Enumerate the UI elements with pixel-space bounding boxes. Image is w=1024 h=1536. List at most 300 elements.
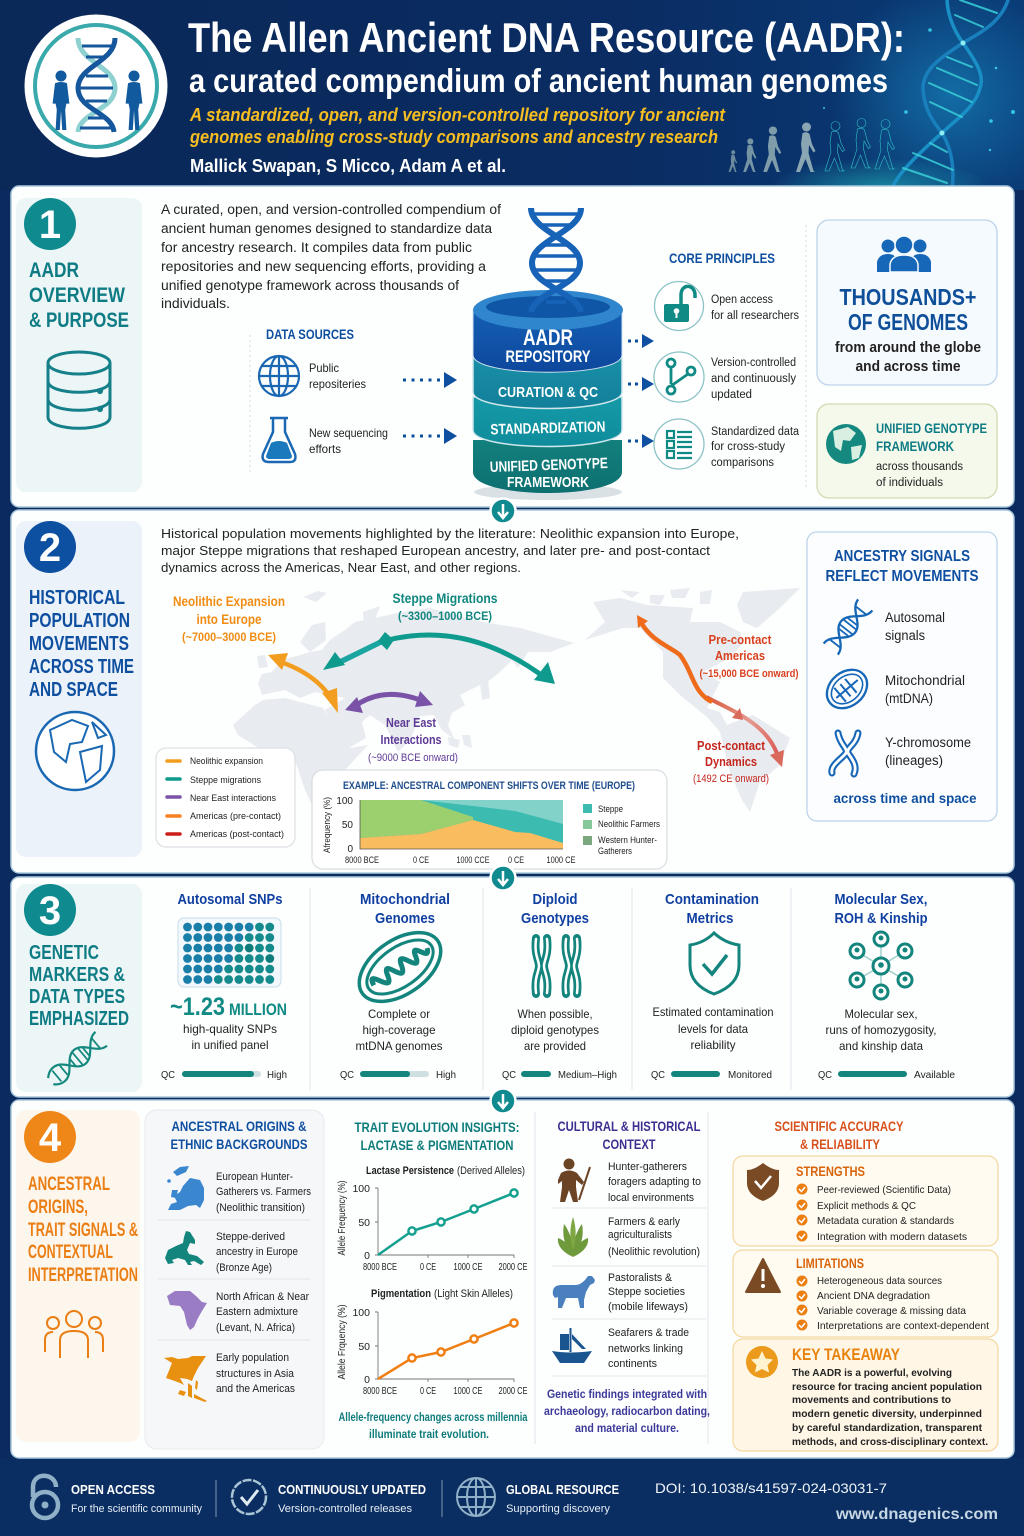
panel 2: historical population movements bbox=[11, 510, 1014, 873]
intro text: A curated, open, and version-controlled compendium of bbox=[161, 202, 501, 217]
map legend: Americas (post-contact) bbox=[190, 829, 284, 840]
line chart: lactase persistence: 100 bbox=[352, 1183, 370, 1195]
text: seafarers: Seafarers & trade bbox=[608, 1327, 689, 1339]
section heading: AND SPACE bbox=[29, 679, 118, 701]
core principles: CORE PRINCIPLES bbox=[669, 250, 775, 266]
cylinder layer: unified genotype framework: UNIFIED GENOTYPE bbox=[490, 455, 608, 476]
QC bar bbox=[818, 1069, 955, 1081]
principle: version control: updated bbox=[711, 389, 752, 401]
intro text bbox=[161, 526, 739, 575]
QC bar: QC bbox=[651, 1069, 665, 1081]
column: contamination metrics: Estimated contamination bbox=[652, 1005, 774, 1019]
arrow: pre-contact Americas bbox=[637, 615, 712, 702]
icon: people bbox=[877, 236, 931, 272]
column: scientific accuracy bbox=[733, 1118, 998, 1451]
stacked area chart: 0 CE bbox=[413, 855, 429, 866]
arrow: near east interactions bbox=[345, 691, 433, 713]
QC bar: High bbox=[436, 1069, 456, 1081]
text: farmers: (Neolithic revolution) bbox=[608, 1246, 700, 1258]
card: unified genotype framework: FRAMEWORK bbox=[876, 438, 954, 454]
QC bar bbox=[340, 1069, 456, 1081]
text: hunter-gatherers bbox=[608, 1161, 701, 1204]
checklist: Metadata curation & standards bbox=[817, 1215, 954, 1227]
QC bar: High bbox=[267, 1069, 287, 1081]
principle: standardized data bbox=[654, 419, 800, 469]
footer: DOI: DOI: 10.1038/s41597-024-03031-7 bbox=[655, 1480, 887, 1496]
arrow: steppe migrations bbox=[323, 632, 555, 684]
context note: and material culture. bbox=[575, 1421, 679, 1435]
section heading: MOVEMENTS bbox=[29, 633, 129, 655]
column: mitochondrial genomes: Complete or bbox=[368, 1007, 430, 1021]
line chart: pigmentation: 2000 CE bbox=[498, 1386, 528, 1397]
column: trait evolution bbox=[336, 1112, 535, 1444]
footer: open access: For the scientific community bbox=[71, 1503, 202, 1515]
column: mitochondrial genomes bbox=[340, 891, 456, 1081]
line chart: pigmentation: Pigmentation(Light Skin Alleles) bbox=[371, 1288, 513, 1300]
icon: shield bbox=[690, 933, 739, 994]
QC bar: QC bbox=[818, 1069, 832, 1081]
map label: Pre-contact: Pre-contact bbox=[708, 632, 772, 647]
card: ancestry signals: ANCESTRY SIGNALS bbox=[834, 548, 970, 565]
card: thousands of genomes: and across time bbox=[856, 358, 960, 375]
icon: chromosomes bbox=[536, 938, 577, 994]
checklist bbox=[796, 1275, 989, 1332]
icon: shield bbox=[747, 1163, 779, 1201]
line chart: pigmentation: Allele Frquency (%) bbox=[336, 1304, 348, 1380]
origin text: early populations: structures in Asia bbox=[216, 1368, 295, 1380]
cylinder layer: AADR repository bbox=[473, 290, 623, 372]
section heading bbox=[29, 587, 134, 701]
text: hunter-gatherers: foragers adapting to bbox=[608, 1176, 701, 1188]
line chart: pigmentation: 0 bbox=[364, 1374, 370, 1386]
QC bar bbox=[161, 1069, 287, 1081]
map label: Post-contact: (1492 CE onward) bbox=[693, 773, 769, 785]
repository cylinder bbox=[473, 208, 623, 500]
text: autosomal signals: Autosomal bbox=[885, 610, 945, 625]
card: key takeaway: KEY TAKEAWAY bbox=[792, 1345, 901, 1364]
icon: SNP dot matrix bbox=[178, 918, 281, 987]
column: mitochondrial genomes: mtDNA genomes bbox=[356, 1039, 442, 1053]
text: farmers: Farmers & early bbox=[608, 1216, 680, 1228]
card: thousands of genomes: THOUSANDS+ bbox=[840, 284, 976, 310]
section heading: ACROSS TIME bbox=[29, 656, 134, 678]
text: y-chromosome: Y-chromosome bbox=[885, 735, 971, 750]
context note bbox=[544, 1387, 710, 1435]
principle: version control bbox=[654, 352, 796, 402]
card: key takeaway: movements and contributions to bbox=[792, 1394, 951, 1406]
QC bar: Available bbox=[914, 1069, 955, 1081]
QC bar: QC bbox=[340, 1069, 354, 1081]
card: limitations bbox=[733, 1250, 998, 1337]
text: pastoralists: Steppe societies bbox=[608, 1286, 685, 1298]
map label: Post-contact: Dynamics bbox=[705, 754, 757, 769]
icon: DNA helix bbox=[531, 208, 581, 312]
section heading: ORIGINS, bbox=[28, 1197, 88, 1218]
world map bbox=[233, 588, 800, 818]
QC bar: QC bbox=[161, 1069, 175, 1081]
title: The Allen Ancient DNA Resource (AADR): bbox=[188, 14, 905, 61]
section heading: POPULATION bbox=[29, 610, 130, 632]
card: key takeaway: resource for tracing ancient population bbox=[792, 1381, 982, 1393]
icon: horse bbox=[165, 1231, 204, 1265]
icon: Asia and Americas map bbox=[164, 1356, 207, 1402]
origin text: early populations: and the Americas bbox=[216, 1383, 295, 1395]
column: diploid genotypes: are provided bbox=[524, 1039, 586, 1053]
icon: Y chromosome bbox=[832, 733, 858, 774]
card: strengths: STRENGTHS bbox=[796, 1163, 865, 1179]
chart card: ancestral component shifts: EXAMPLE: ANCESTRAL COMPONENT SHIFTS OVER TIME (EUROPE) bbox=[343, 780, 635, 792]
icon: background DNA helix bbox=[892, 0, 1008, 190]
icon: people group bbox=[45, 1311, 103, 1358]
QC bar: Monitored bbox=[728, 1069, 772, 1081]
origin text: steppe: ancestry in Europe bbox=[216, 1246, 298, 1258]
text: pastoralists: (mobile lifeways) bbox=[608, 1301, 688, 1313]
section heading: CONTEXTUAL bbox=[28, 1242, 113, 1263]
connector arrow 3 bbox=[490, 1088, 516, 1114]
arrow: post-contact dynamics bbox=[706, 697, 784, 767]
stat: 1.23 million bbox=[170, 993, 287, 1021]
text: public repositories: Public bbox=[309, 361, 339, 375]
stacked area chart: 50 bbox=[342, 820, 353, 831]
checklist: Heterogeneous data sources bbox=[817, 1275, 942, 1287]
column: diploid genotypes: diploid genotypes bbox=[511, 1023, 599, 1037]
text: farmers bbox=[608, 1216, 700, 1258]
footer: global resource: GLOBAL RESOURCE bbox=[506, 1482, 619, 1497]
section heading: DATA TYPES bbox=[29, 986, 125, 1008]
text: autosomal signals bbox=[885, 610, 945, 643]
section heading bbox=[29, 942, 129, 1030]
authors: Mallick Swapan, S Micco, Adam A et al. bbox=[190, 156, 506, 176]
section sidebar bbox=[16, 1110, 140, 1442]
chart note: illuminate trait evolution. bbox=[369, 1427, 489, 1441]
subtitle: genomes enabling cross-study comparisons and ancestry research bbox=[189, 127, 718, 147]
sub-panel: ancestral origins: ETHNIC BACKGROUNDS bbox=[170, 1136, 308, 1152]
footer: open access: OPEN ACCESS bbox=[71, 1482, 155, 1497]
card: unified genotype framework bbox=[817, 404, 997, 498]
cylinder layer: standardization: STANDARDIZATION bbox=[490, 418, 606, 439]
map label: Steppe migrations: (~3300–1000 BCE) bbox=[398, 609, 492, 623]
footer: global resource bbox=[457, 1478, 619, 1516]
principle: open access: for all researchers bbox=[711, 310, 799, 322]
section number bbox=[24, 521, 76, 573]
intro text: ancient human genomes designed to standardize data bbox=[161, 221, 492, 236]
section heading: AADR bbox=[29, 259, 79, 282]
subtitle bbox=[189, 105, 726, 147]
icon: sailing ship bbox=[552, 1328, 592, 1363]
icon: database bbox=[48, 352, 110, 428]
card: key takeaway: modern genetic diversity, underpinned bbox=[792, 1408, 982, 1420]
column: cultural and historical context: CONTEXT bbox=[602, 1136, 656, 1152]
footer: continuously updated bbox=[232, 1480, 426, 1515]
column: trait evolution: LACTASE & PIGMENTATION bbox=[360, 1137, 514, 1153]
section heading: ANCESTRAL bbox=[28, 1174, 110, 1195]
arrow: public repositories to repository bbox=[403, 372, 457, 388]
line chart: lactase persistence: 2000 CE bbox=[498, 1262, 528, 1273]
icon: logo DNA bbox=[78, 38, 115, 132]
origin text: steppe: Steppe-derived bbox=[216, 1231, 285, 1243]
panel 3: genetic markers bbox=[11, 877, 1014, 1097]
stacked area chart: Afrequency (%) bbox=[322, 797, 333, 853]
QC bar: Medium–High bbox=[558, 1069, 617, 1081]
origin text: early populations: Early population bbox=[216, 1352, 289, 1364]
line chart: pigmentation: 1000 CE bbox=[454, 1386, 483, 1397]
map legend: Near East interactions bbox=[190, 793, 276, 804]
stacked area chart: 1000 CCE bbox=[456, 855, 490, 866]
line chart: pigmentation bbox=[336, 1288, 528, 1397]
section heading: EMPHASIZED bbox=[29, 1008, 129, 1030]
map label: Neolithic expansion: into Europe bbox=[196, 611, 262, 627]
map label: Near East: (~9000 BCE onward) bbox=[368, 752, 458, 764]
chart legend bbox=[583, 804, 660, 856]
line chart: pigmentation: 100 bbox=[352, 1307, 370, 1319]
data sources: DATA SOURCES bbox=[266, 326, 354, 342]
section number: 1 bbox=[39, 203, 61, 247]
map legend bbox=[156, 748, 295, 847]
intro text bbox=[161, 202, 501, 311]
column: molecular sex, ROH, kinship: runs of homozygosity, bbox=[826, 1023, 936, 1037]
checklist: Peer-reviewed (Scientific Data) bbox=[817, 1184, 951, 1196]
origin text: European: European Hunter- bbox=[216, 1171, 293, 1183]
section number: 3 bbox=[39, 889, 61, 933]
section heading: & PURPOSE bbox=[29, 309, 129, 332]
column: molecular sex, ROH, kinship: and kinship data bbox=[839, 1039, 923, 1053]
map label: Pre-contact bbox=[700, 632, 799, 680]
column: autosomal SNPs bbox=[161, 891, 287, 1081]
icon: human evolution silhouettes bbox=[729, 118, 894, 172]
column: molecular sex, ROH, kinship: Molecular sex, bbox=[844, 1007, 918, 1021]
principle: version control: Version-controlled bbox=[711, 357, 796, 369]
title bbox=[188, 14, 905, 99]
chart legend: Western Hunter- bbox=[598, 835, 657, 845]
line chart: pigmentation: 0 CE bbox=[420, 1386, 436, 1397]
card: limitations: LIMITATIONS bbox=[796, 1255, 864, 1271]
section number: 2 bbox=[39, 526, 61, 570]
section heading bbox=[28, 1174, 138, 1286]
core principles bbox=[628, 250, 800, 469]
column: contamination metrics: levels for data bbox=[678, 1022, 748, 1036]
intro text: repositories and new sequencing efforts, providing a bbox=[161, 259, 487, 274]
principle: open access: Open access bbox=[711, 294, 773, 306]
origin text: steppe bbox=[216, 1231, 298, 1274]
text: autosomal signals: signals bbox=[885, 628, 925, 643]
text: y-chromosome bbox=[885, 735, 971, 768]
line chart: lactase persistence: 0 bbox=[364, 1250, 370, 1262]
chart legend: Neolithic Farmers bbox=[598, 819, 660, 829]
text: public repositories: repositeries bbox=[309, 377, 366, 391]
checklist: Explicit methods & QC bbox=[817, 1200, 916, 1212]
column: contamination metrics: Metrics bbox=[686, 910, 734, 927]
panel 1: overview and purpose bbox=[11, 186, 1014, 507]
stacked area chart: 1000 CE bbox=[546, 855, 576, 866]
footer: global resource: Supporting discovery bbox=[506, 1503, 610, 1515]
subtitle: A standardized, open, and version-controlled repository for ancient bbox=[189, 105, 726, 125]
line chart: lactase persistence: Lactase Persistence(Derived Alleles) bbox=[366, 1165, 525, 1177]
column: molecular sex, ROH, kinship: Molecular Sex, bbox=[834, 891, 928, 908]
chart card: ancestral component shifts bbox=[312, 770, 667, 869]
text: pastoralists: Pastoralists & bbox=[608, 1272, 673, 1284]
card: ancestry signals: across time and space bbox=[834, 790, 977, 806]
section sidebar bbox=[16, 884, 142, 1092]
section number: 4 bbox=[39, 1116, 62, 1160]
text: mitochondrial bbox=[885, 673, 965, 706]
icon: Europe map bbox=[167, 1166, 204, 1210]
text: seafarers: continents bbox=[608, 1358, 657, 1370]
intro text: Historical population movements highlighted by the literature: Neolithic expansion into Europe, bbox=[161, 526, 739, 541]
map label: Near East: Interactions bbox=[380, 732, 442, 747]
checklist: Variable coverage & missing data bbox=[817, 1305, 966, 1317]
map legend: Steppe migrations bbox=[190, 775, 261, 786]
origin text: European: (Neolithic transition) bbox=[216, 1202, 305, 1214]
cylinder layer: standardization bbox=[473, 397, 622, 446]
column: scientific accuracy: SCIENTIFIC ACCURACY bbox=[774, 1118, 904, 1134]
QC bar bbox=[502, 1069, 617, 1081]
column: autosomal SNPs: high-quality SNPs bbox=[183, 1022, 277, 1036]
intro text: unified genotype framework across thousands of bbox=[161, 278, 459, 293]
cylinder layer: curation and QC: CURATION & QC bbox=[498, 384, 598, 401]
column: diploid genotypes bbox=[502, 891, 617, 1081]
origin text: North African: (Levant, N. Africa) bbox=[216, 1322, 295, 1334]
stacked area chart: 0 CE bbox=[508, 855, 524, 866]
map label: Pre-contact: Americas bbox=[715, 648, 765, 663]
line chart: lactase persistence bbox=[336, 1165, 528, 1273]
panel 4: ancestral origins and interpretation bbox=[11, 1100, 1014, 1458]
text: pastoralists bbox=[608, 1272, 688, 1313]
column: molecular sex, ROH, kinship bbox=[818, 891, 955, 1081]
intro text: individuals. bbox=[161, 296, 230, 311]
footer: continuously updated: Version-controlled releases bbox=[278, 1503, 412, 1515]
origin text: steppe: (Bronze Age) bbox=[216, 1262, 272, 1274]
card: unified genotype framework: UNIFIED GENOTYPE bbox=[876, 420, 987, 436]
icon: crop plant bbox=[558, 1217, 588, 1257]
text: mitochondrial: Mitochondrial bbox=[885, 673, 965, 688]
principle: standardized data: Standardized data bbox=[711, 426, 800, 438]
card: key takeaway bbox=[733, 1339, 998, 1451]
icon: hunter-gatherer bbox=[558, 1158, 590, 1202]
data sources bbox=[250, 326, 457, 475]
cylinder layer: AADR repository: AADR bbox=[523, 325, 573, 350]
column: mitochondrial genomes: Genomes bbox=[375, 910, 435, 927]
section heading: GENETIC bbox=[29, 942, 99, 964]
intro text: major Steppe migrations that reshaped European ancestry, and later pre- and post-contact bbox=[161, 543, 710, 558]
chart legend: Gatherers bbox=[598, 846, 632, 856]
text: seafarers: networks linking bbox=[608, 1343, 683, 1355]
stacked area chart: 8000 BCE bbox=[345, 855, 379, 866]
map label: Pre-contact: (~15,000 BCE onward) bbox=[700, 668, 799, 680]
principle: open access bbox=[654, 282, 799, 330]
column: cultural and historical context bbox=[544, 1112, 710, 1444]
card: strengths bbox=[733, 1156, 998, 1246]
footer: continuously updated: CONTINUOUSLY UPDATED bbox=[278, 1482, 426, 1497]
section number bbox=[24, 198, 76, 250]
section number bbox=[24, 884, 76, 936]
card: thousands of genomes: OF GENOMES bbox=[848, 309, 968, 335]
line chart: lactase persistence: 0 CE bbox=[420, 1262, 436, 1273]
checklist: Ancient DNA degradation bbox=[817, 1290, 930, 1302]
cylinder layer: unified genotype framework: FRAMEWORK bbox=[507, 474, 589, 491]
text: public repositories bbox=[309, 361, 366, 391]
origin text: North African: Eastern admixture bbox=[216, 1306, 298, 1318]
icon: logo figures bbox=[53, 70, 142, 130]
line chart: lactase persistence: 1000 CE bbox=[454, 1262, 483, 1273]
footer bbox=[32, 1476, 998, 1523]
column: diploid genotypes: When possible, bbox=[518, 1007, 592, 1021]
icon: DNA bbox=[45, 1032, 107, 1088]
footer: website: www.dnagenics.com bbox=[835, 1506, 998, 1523]
logo badge bbox=[24, 14, 168, 158]
chart legend: Steppe bbox=[598, 804, 623, 814]
column: contamination metrics: reliability bbox=[690, 1038, 736, 1052]
section sidebar bbox=[16, 198, 142, 492]
checklist: Interpretations are context-dependent bbox=[817, 1320, 989, 1332]
text: hunter-gatherers: local environments bbox=[608, 1192, 694, 1204]
principle: version control: and continuously bbox=[711, 373, 796, 385]
column: contamination metrics: Contamination bbox=[665, 891, 759, 908]
sub-panel: ancestral origins bbox=[145, 1110, 324, 1449]
arrows: repository to principles bbox=[628, 334, 654, 448]
card: unified genotype framework: of individuals bbox=[876, 477, 943, 489]
column: autosomal SNPs: in unified panel bbox=[192, 1038, 268, 1052]
line chart: lactase persistence: 50 bbox=[358, 1217, 370, 1229]
icon: earth bbox=[826, 424, 866, 464]
icon: mitochondrion bbox=[819, 662, 875, 716]
map label: Steppe migrations bbox=[392, 590, 498, 623]
line chart: pigmentation: 50 bbox=[358, 1341, 370, 1353]
origin text: European: Gatherers vs. Farmers bbox=[216, 1186, 311, 1198]
QC bar bbox=[651, 1069, 772, 1081]
arrow: neolithic expansion bbox=[268, 653, 338, 713]
text: new sequencing bbox=[309, 426, 388, 456]
chart note bbox=[338, 1410, 528, 1441]
column: cultural and historical context: CULTURAL & HISTORICAL bbox=[558, 1118, 701, 1134]
icon: cattle bbox=[553, 1276, 595, 1308]
column: trait evolution: TRAIT EVOLUTION INSIGHTS: bbox=[354, 1119, 520, 1135]
section number bbox=[24, 1111, 76, 1163]
map label: Post-contact bbox=[693, 738, 769, 785]
card: key takeaway: methods, and cross-disciplinary context. bbox=[792, 1436, 988, 1448]
stacked area chart: 0 bbox=[347, 844, 353, 855]
icon: warning triangle bbox=[746, 1259, 780, 1292]
chart note: Allele-frequency changes across millennia bbox=[338, 1410, 528, 1424]
section heading bbox=[29, 259, 129, 332]
card: ancestry signals: REFLECT MOVEMENTS bbox=[826, 568, 979, 585]
card: thousands of genomes bbox=[817, 220, 997, 385]
intro text: dynamics across the Americas, Near East, and other regions. bbox=[161, 560, 521, 575]
footer: open access bbox=[32, 1476, 202, 1518]
origin text: North African: North African & Near bbox=[216, 1291, 309, 1303]
context note: Genetic findings integrated with bbox=[547, 1387, 707, 1401]
map label: Neolithic expansion: Neolithic Expansion bbox=[173, 593, 285, 609]
cylinder layer: curation and QC bbox=[473, 358, 622, 408]
title: a curated compendium of ancient human genomes bbox=[189, 62, 888, 99]
icon: globe bbox=[259, 356, 299, 396]
arrow: new sequencing to repository bbox=[403, 428, 457, 444]
map legend: Neolithic expansion bbox=[190, 756, 263, 767]
checklist: Integration with modern datasets bbox=[817, 1231, 967, 1243]
column: scientific accuracy: & RELIABILITY bbox=[800, 1136, 881, 1152]
text: hunter-gatherers: Hunter-gatherers bbox=[608, 1161, 687, 1173]
origin text: European bbox=[216, 1171, 311, 1214]
column: diploid genotypes: Genotypes bbox=[521, 910, 589, 927]
card: ancestry signals bbox=[807, 532, 997, 821]
map legend: Americas (pre-contact) bbox=[190, 811, 281, 822]
text: seafarers bbox=[608, 1327, 689, 1370]
section heading: INTERPRETATION bbox=[28, 1265, 138, 1286]
principle: standardized data: comparisons bbox=[711, 457, 774, 469]
card: key takeaway: by careful standardization, transparent bbox=[792, 1422, 982, 1434]
column: molecular sex, ROH, kinship: ROH & Kinship bbox=[834, 910, 928, 927]
icon: kinship network bbox=[850, 932, 912, 999]
column: mitochondrial genomes: high-coverage bbox=[362, 1023, 436, 1037]
